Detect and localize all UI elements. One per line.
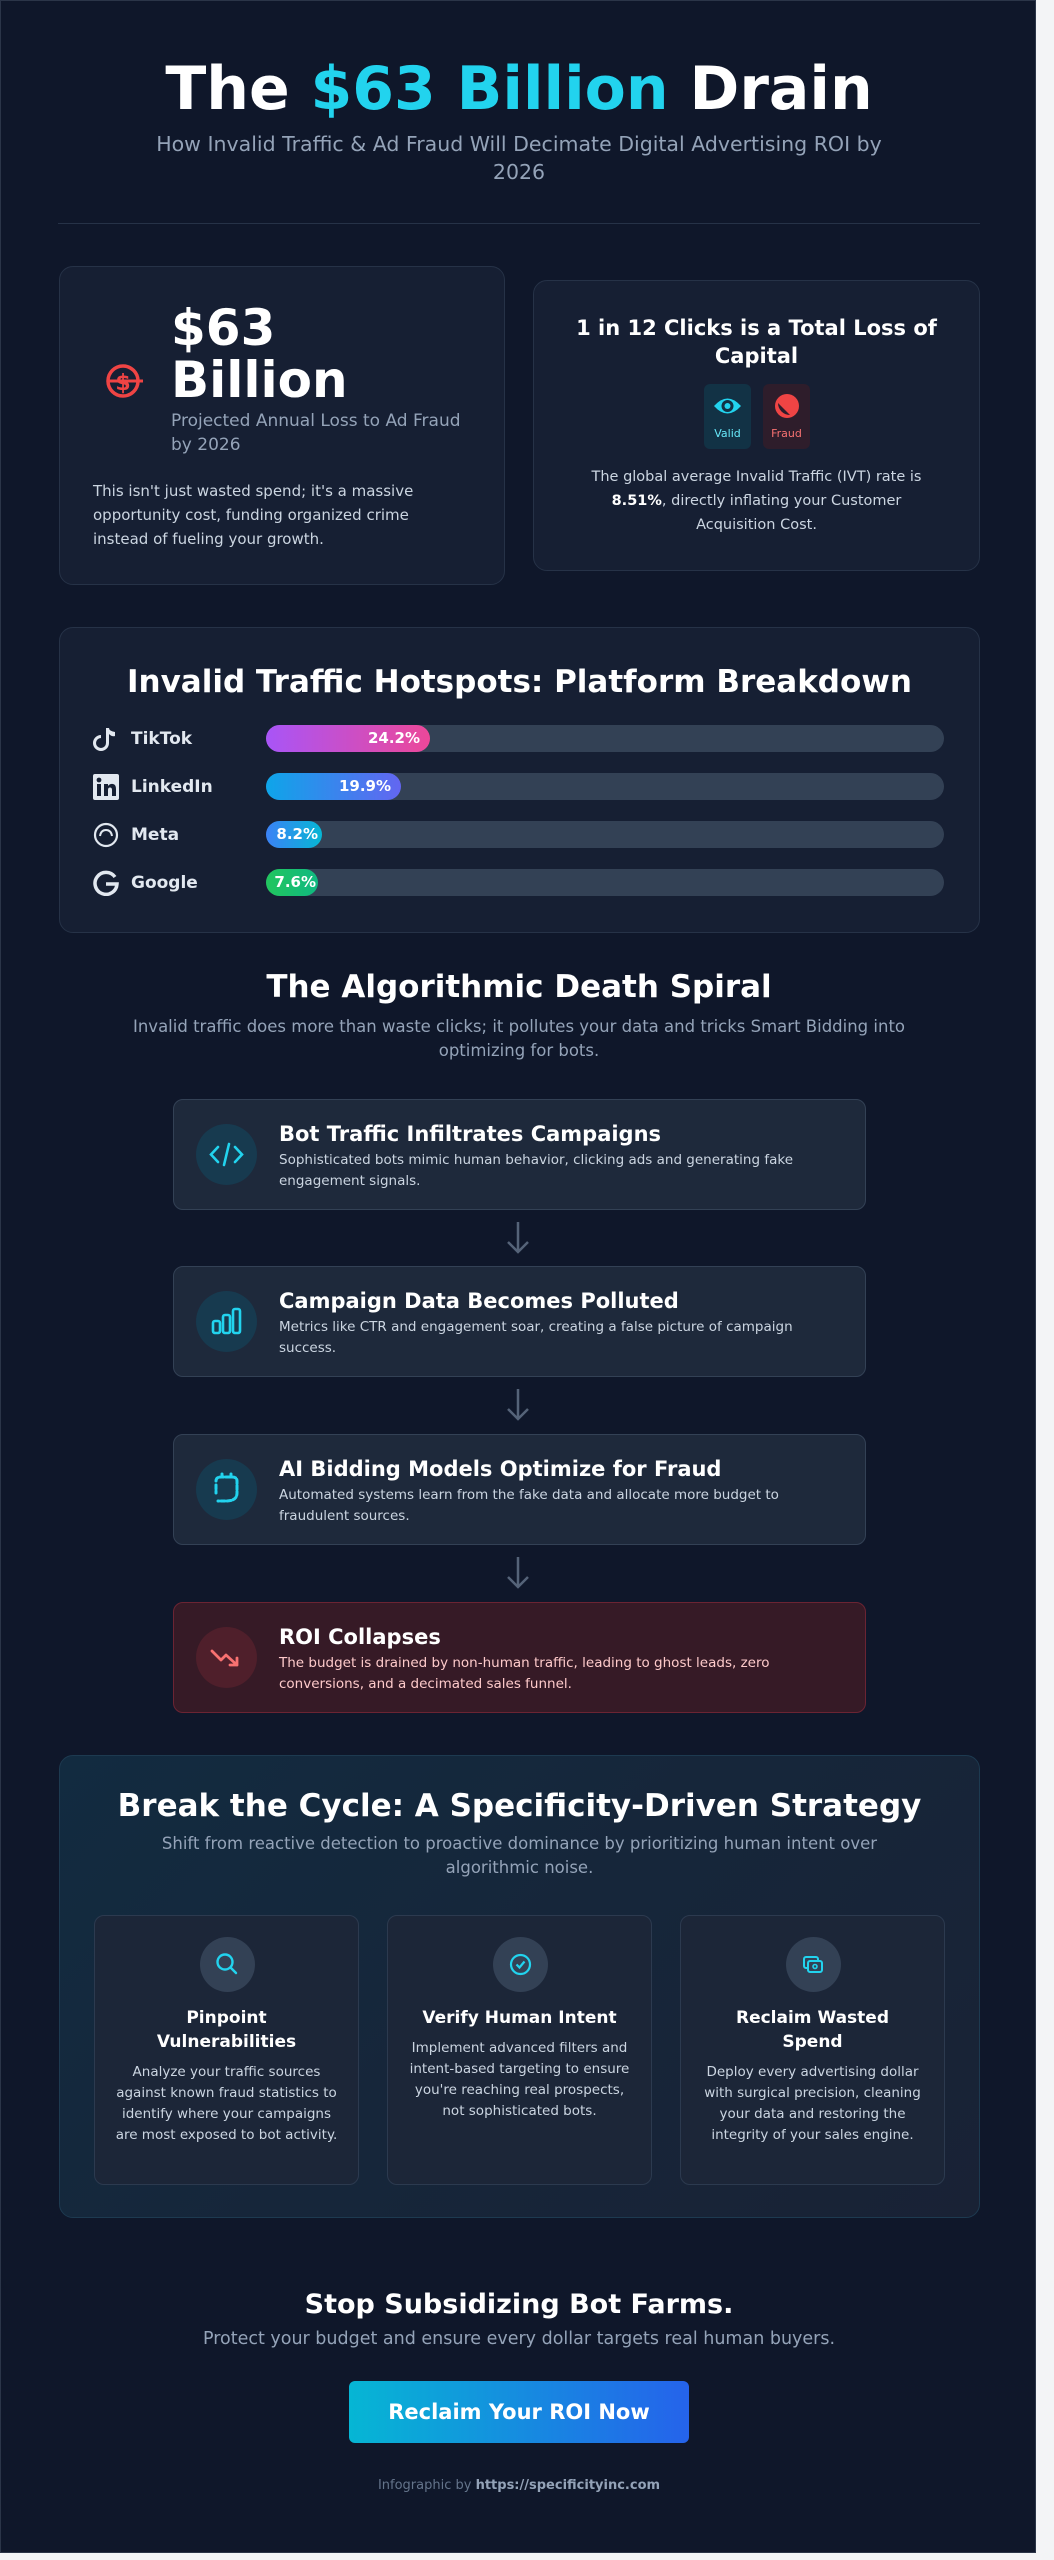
bar: LinkedIn: LinkedIn xyxy=(131,777,213,797)
bar: TikTok: TikTok xyxy=(131,729,192,749)
subtitle: How Invalid Traffic & Ad Fraud Will Decimate Digital Advertising ROI by 2026 xyxy=(156,132,882,184)
step 1: Sophisticated bots mimic human behavior, clicking ads and generating fake engagement signals. xyxy=(279,1152,793,1189)
icon: dollar target xyxy=(106,364,143,398)
card: verify xyxy=(387,1915,652,2185)
icon: dollar target: $ xyxy=(115,371,131,396)
step 4: ROI collapses: The budget is drained by non-human traffic, leading to ghost leads, zero conversions, and a decimated sales funnel. xyxy=(279,1655,769,1692)
card: pinpoint: Pinpoint Vulnerabilities xyxy=(157,2008,296,2052)
icon: search xyxy=(200,1937,255,1992)
heading: 1 in 12 Clicks is a Total Loss of Capital xyxy=(576,316,937,368)
heading: death spiral: The Algorithmic Death Spiral xyxy=(266,969,772,1005)
button: Reclaim Your ROI Now xyxy=(388,2400,650,2424)
subtitle: death spiral: Invalid traffic does more than waste clicks; it pollutes your data and tricks Smart Bidding into optimizing for bots. xyxy=(133,1017,905,1060)
body text: This isn't just wasted spend; it's a massive opportunity cost, funding organized crime instead of fueling your growth. xyxy=(93,482,413,548)
step 1 xyxy=(173,1099,866,1210)
icon: valid xyxy=(704,384,751,449)
step 4: ROI collapses xyxy=(173,1602,866,1713)
title: The $63 Billion Drain xyxy=(165,54,873,124)
icon: money xyxy=(786,1937,841,1992)
card: reclaim xyxy=(680,1915,945,2185)
bar: Meta xyxy=(94,821,944,848)
card: pinpoint xyxy=(94,1915,359,2185)
arrow xyxy=(507,1557,529,1589)
arrow xyxy=(507,1389,529,1421)
icon: valid: Valid xyxy=(714,427,741,440)
body text: The global average Invalid Traffic (IVT) rate is 8.51%, directly inflating your Customer Acquisition Cost. xyxy=(592,469,921,533)
bar: Google: 7.6% xyxy=(274,873,316,891)
stat value: Billion xyxy=(171,351,348,409)
stat caption: Projected Annual Loss to Ad Fraud by 2026 xyxy=(171,411,461,455)
bar: Google xyxy=(93,869,944,896)
step 2: Metrics like CTR and engagement soar, creating a false picture of campaign success. xyxy=(279,1319,793,1356)
bar: Meta: Meta xyxy=(131,825,179,845)
heading: Invalid Traffic Hotspots: Platform Breakdown xyxy=(127,664,912,700)
step 2 xyxy=(173,1266,866,1377)
bar: TikTok: 24.2% xyxy=(368,729,420,747)
icon: robot xyxy=(196,1459,257,1520)
step 3: Automated systems learn from the fake data and allocate more budget to fraudulent sources. xyxy=(279,1487,779,1524)
heading: CTA: Stop Subsidizing Bot Farms. xyxy=(305,2289,733,2320)
panel: break the cycle xyxy=(59,1755,980,2218)
footer: Infographic by https://specificityinc.com xyxy=(378,2478,660,2493)
panel: $63 billion loss xyxy=(59,266,505,585)
heading: Break the Cycle: A Specificity-Driven Strategy xyxy=(118,1788,921,1824)
step 2: Campaign Data Becomes Polluted xyxy=(279,1289,679,1313)
panel: platform breakdown xyxy=(59,627,980,933)
card: reclaim: Reclaim Wasted Spend xyxy=(736,2008,889,2052)
card: reclaim: Deploy every advertising dollar with surgical precision, cleaning your data and restoring the integrity of your sales engine. xyxy=(704,2064,921,2143)
step 3: AI Bidding Models Optimize for Fraud xyxy=(279,1457,721,1481)
bar: TikTok xyxy=(93,725,944,752)
stat value xyxy=(171,299,348,409)
bar: Google: Google xyxy=(131,873,198,893)
icon: code xyxy=(196,1124,257,1185)
card: verify: Implement advanced filters and intent-based targeting to ensure you're reaching real prospects, not sophisticated bots. xyxy=(410,2040,629,2119)
bar chart xyxy=(93,725,944,896)
step 3 xyxy=(173,1434,866,1545)
button xyxy=(349,2381,689,2443)
icon: fraud: Fraud xyxy=(771,427,802,440)
bar: Meta: 8.2% xyxy=(276,825,318,843)
icon: fraud xyxy=(763,384,810,449)
icon: bar chart xyxy=(196,1291,257,1352)
bar: LinkedIn xyxy=(93,773,944,800)
panel: 1 in 12 clicks xyxy=(533,280,980,571)
CTA subtitle: Protect your budget and ensure every dollar targets real human buyers. xyxy=(203,2329,835,2349)
subtitle: Shift from reactive detection to proactive dominance by prioritizing human intent over algorithmic noise. xyxy=(162,1834,877,1877)
card: verify: Verify Human Intent xyxy=(422,2008,617,2028)
arrow xyxy=(507,1222,529,1254)
card: pinpoint: Analyze your traffic sources against known fraud statistics to identify where your campaigns are most exposed to bot activity. xyxy=(116,2064,337,2143)
stat value: $63 xyxy=(171,299,275,357)
icon: trending down xyxy=(196,1627,257,1688)
step 1: Bot Traffic Infiltrates Campaigns xyxy=(279,1122,661,1146)
icon: check circle xyxy=(493,1937,548,1992)
step 4: ROI collapses: ROI Collapses xyxy=(279,1625,441,1649)
bar: LinkedIn: 19.9% xyxy=(339,777,391,795)
